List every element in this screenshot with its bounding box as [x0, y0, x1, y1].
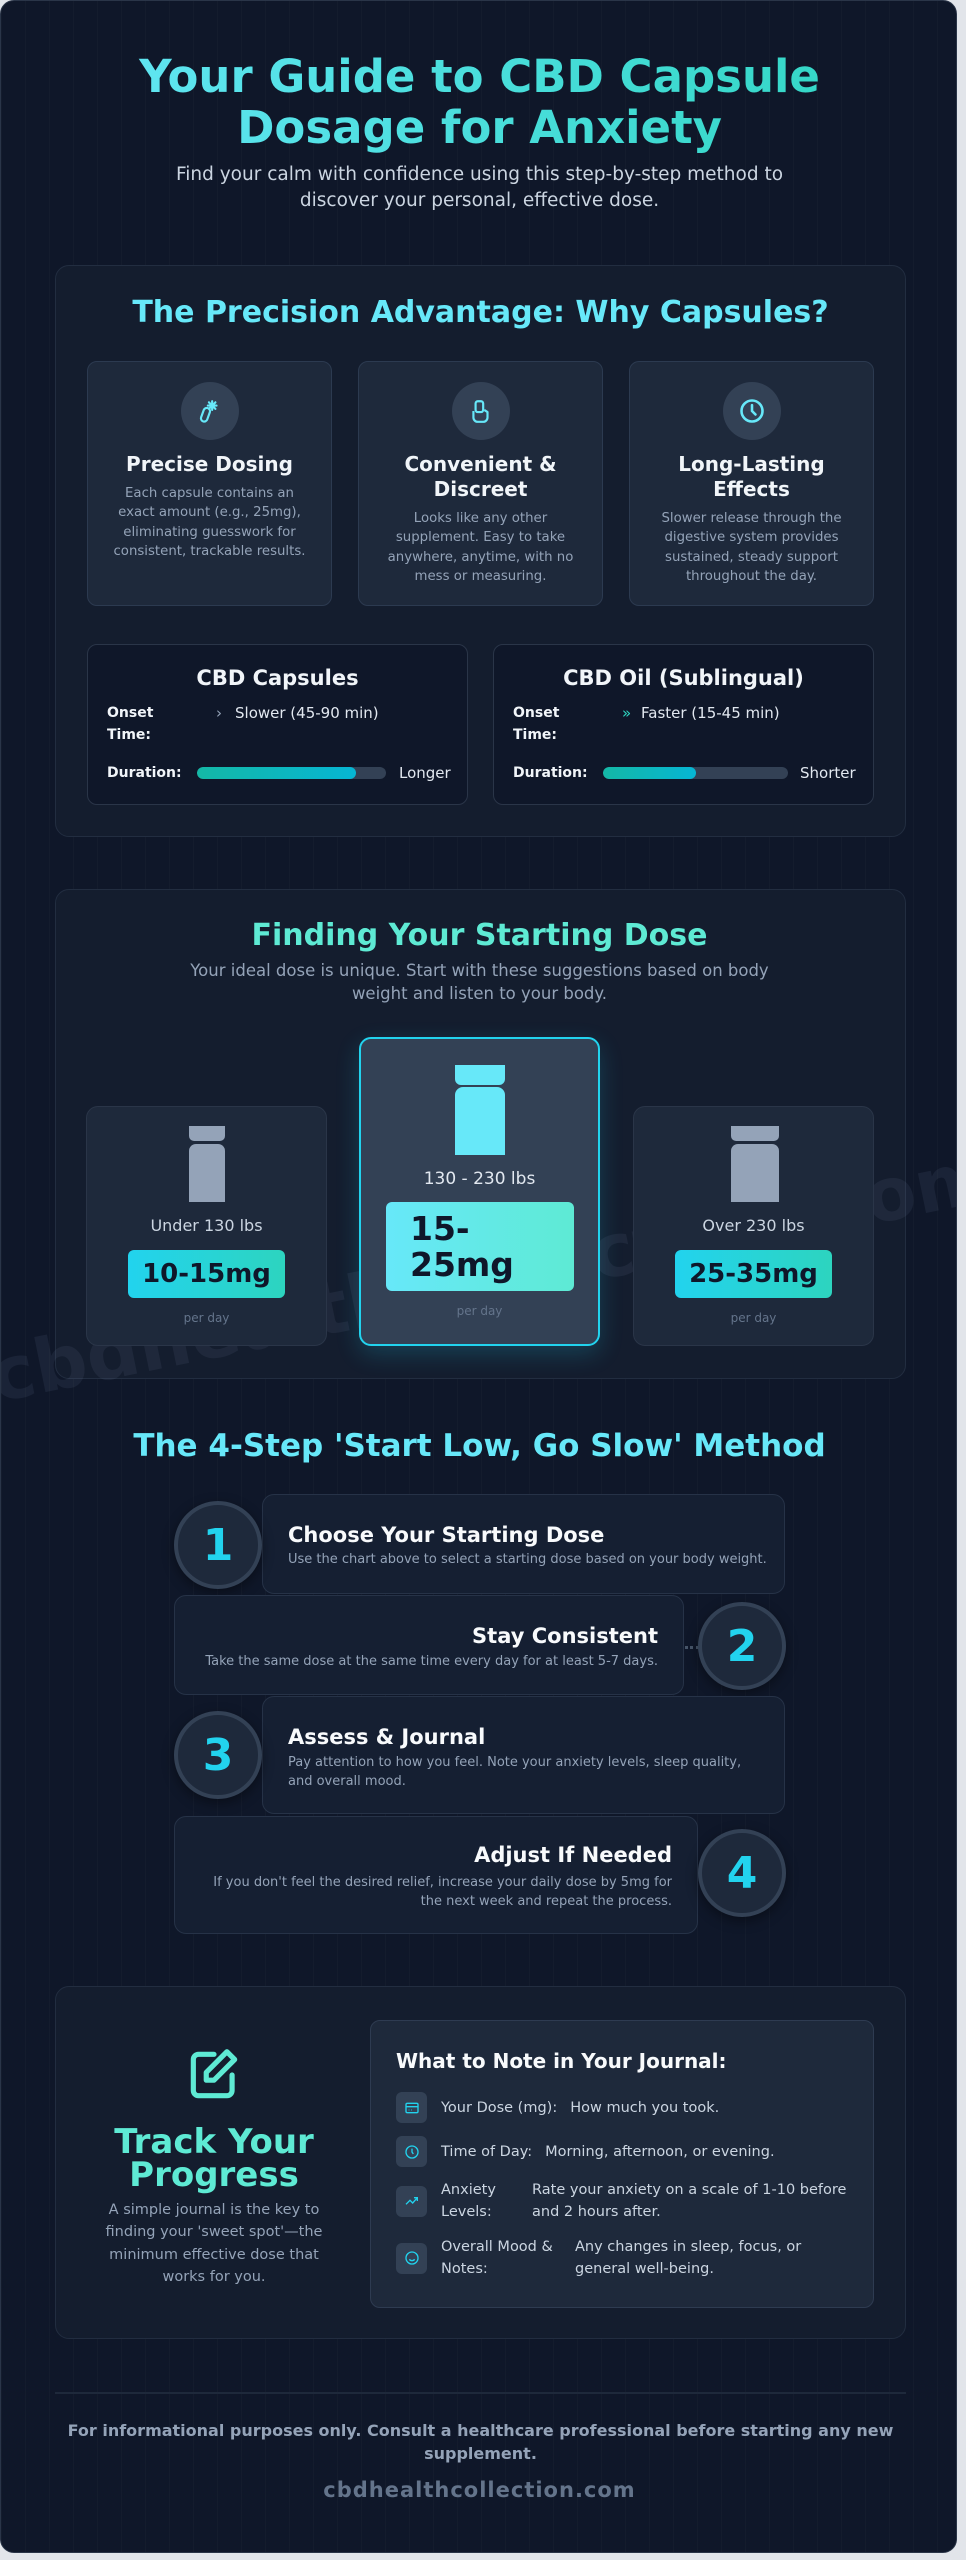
card: convenient — [358, 361, 603, 606]
step 3 card: Assess & Journal — [288, 1725, 485, 1749]
row: dose: How much you took. — [570, 2100, 719, 2116]
step 3 card: Pay attention to how you feel. Note your anxiety levels, sleep quality, and overall mood. — [288, 1755, 741, 1789]
panel: track progress — [55, 1986, 906, 2339]
comparison: oil: » — [622, 704, 631, 722]
dose card: over 230: 25-35mg — [689, 1259, 818, 1289]
dose card: 130-230 highlighted: 130 - 230 lbs — [424, 1169, 535, 1189]
step 4 card: If you don't feel the desired relief, increase your daily dose by 5mg for the next week and repeat the process. — [213, 1875, 672, 1909]
dose card: 130-230 highlighted — [359, 1037, 600, 1346]
subtext — [190, 961, 769, 1003]
comparison: oil: Time: — [513, 727, 557, 743]
row: anxiety: Rate your anxiety on a scale of 1-10 before and 2 hours after. — [532, 2182, 846, 2220]
subtitle: Find your calm with confidence using this step-by-step method to — [176, 164, 783, 185]
comparison: oil: Faster (15-45 min) — [641, 704, 780, 722]
card: long-lasting: Effects — [713, 477, 790, 501]
comparison: capsules: › — [216, 704, 222, 722]
heading: track progress: Progress — [129, 2155, 299, 2195]
row: mood: Any changes in sleep, focus, or general well-being. — [575, 2239, 801, 2277]
dose card: under 130 — [86, 1106, 327, 1346]
row: anxiety — [396, 2182, 846, 2220]
dose card: 130-230 highlighted: 25mg — [410, 1244, 514, 1284]
journal box — [370, 2020, 874, 2308]
journal box: What to Note in Your Journal: — [396, 2049, 727, 2073]
row: time: Time of Day: — [441, 2144, 532, 2160]
subtext: Your ideal dose is unique. Start with these suggestions based on body — [190, 961, 769, 980]
comparison: capsules: Time: — [107, 727, 151, 743]
step 1 card: Choose Your Starting Dose — [288, 1523, 604, 1547]
dose card: over 230: per day — [731, 1311, 776, 1325]
row: mood — [396, 2239, 802, 2277]
card: long-lasting: Slower release through the digestive system provides sustained, steady support throughout the day. — [661, 511, 842, 584]
text: journal key: A simple journal is the key to finding your 'sweet spot'—the minimum effective dose that works for you. — [106, 2202, 322, 2285]
comparison: oil — [493, 644, 874, 805]
dose card: 130-230 highlighted: per day — [457, 1304, 502, 1318]
comparison: capsules: CBD Capsules — [196, 666, 359, 690]
dose card: under 130: per day — [184, 1311, 229, 1325]
step 1 card — [262, 1494, 785, 1594]
dose card: under 130: 10-15mg — [142, 1259, 271, 1289]
row: dose: Your Dose (mg): — [441, 2100, 557, 2116]
icon: bottle — [455, 1065, 505, 1155]
step 2 number: 2 — [727, 1620, 757, 1672]
panel: why capsules — [55, 265, 906, 837]
footer url: cbdhealthcollection.com — [323, 2478, 636, 2502]
step 4 card: Adjust If Needed — [474, 1843, 672, 1867]
step 4 card — [174, 1816, 698, 1934]
row: mood: Notes: — [441, 2261, 488, 2277]
card: precise dosing — [87, 361, 332, 606]
title: Your Guide to CBD Capsule — [139, 50, 820, 103]
step 3 number — [174, 1711, 262, 1799]
comparison: capsules: Longer — [399, 764, 451, 782]
heading: finding dose: Finding Your Starting Dose — [252, 918, 707, 953]
comparison: capsules — [87, 644, 468, 805]
card: convenient: Convenient & — [404, 452, 557, 476]
card: convenient: Discreet — [434, 477, 527, 501]
subtitle — [176, 164, 783, 211]
row: anxiety: Levels: — [441, 2204, 492, 2220]
comparison: capsules: Onset — [107, 705, 153, 721]
panel: starting dose background — [55, 889, 906, 1379]
step 3 card — [262, 1696, 785, 1814]
icon: hand — [452, 382, 510, 440]
comparison: capsules: Slower (45-90 min) — [235, 704, 379, 722]
comparison: oil: CBD Oil (Sublingual) — [563, 666, 804, 690]
step 1 number — [174, 1501, 262, 1589]
step 4 number: 4 — [727, 1848, 757, 1898]
subtext: weight and listen to your body. — [352, 984, 607, 1003]
heading: track progress — [114, 2122, 314, 2195]
comparison: oil: Shorter — [800, 764, 856, 782]
heading: precision advantage: The Precision Advantage: Why Capsules? — [132, 295, 829, 330]
title — [1, 51, 958, 153]
card: convenient: Looks like any other supplement. Easy to take anywhere, anytime, with no mess or measuring. — [388, 511, 573, 584]
step 4 number — [698, 1829, 786, 1917]
heading: 4-step method: The 4-Step 'Start Low, Go Slow' Method — [133, 1428, 826, 1464]
icon: bottle — [731, 1126, 779, 1202]
row: time — [396, 2136, 775, 2167]
footer disclaimer: For informational purposes only. Consult a healthcare professional before starting any new supplement. — [68, 2421, 893, 2463]
heading: track progress: Track Your — [114, 2122, 314, 2162]
panel: starting dose content — [86, 918, 874, 1363]
dose card: 130-230 highlighted: 15- — [410, 1208, 470, 1248]
row: anxiety: Anxiety — [441, 2182, 496, 2198]
card: precise dosing: Precise Dosing — [126, 452, 293, 476]
comparison: oil: Onset — [513, 705, 559, 721]
icon: pill — [180, 382, 238, 440]
card: long-lasting: Long-Lasting — [678, 452, 825, 476]
row: dose — [396, 2092, 719, 2123]
dose card: over 230: Over 230 lbs — [702, 1216, 805, 1235]
icon: clock — [722, 382, 780, 440]
title: Dosage for Anxiety — [237, 101, 722, 154]
steps — [174, 1494, 786, 1934]
icon: bottle — [189, 1126, 225, 1202]
dose card: over 230 — [633, 1106, 874, 1346]
subtitle: discover your personal, effective dose. — [300, 190, 659, 211]
card: precise dosing: Each capsule contains an exact amount (e.g., 25mg), eliminating guesswork for consistent, trackable results. — [114, 486, 305, 559]
card: long-lasting — [629, 361, 874, 606]
comparison: capsules: Duration: — [107, 765, 182, 781]
step 2 number — [698, 1602, 786, 1690]
comparison: oil: Duration: — [513, 765, 588, 781]
dose card: under 130: Under 130 lbs — [150, 1216, 263, 1235]
row: time: Morning, afternoon, or evening. — [545, 2144, 775, 2160]
step 3 number: 3 — [203, 1730, 233, 1780]
step 1 card: Use the chart above to select a starting dose based on your body weight. — [288, 1552, 767, 1567]
row: mood: Overall Mood & — [441, 2239, 553, 2255]
icon: pencil — [190, 2049, 238, 2098]
step 2 card — [174, 1595, 684, 1695]
step 2 card: Take the same dose at the same time every day for at least 5-7 days. — [205, 1654, 658, 1669]
step 2 card: Stay Consistent — [472, 1624, 658, 1648]
step 1 number: 1 — [203, 1520, 233, 1570]
connector — [685, 1646, 699, 1649]
